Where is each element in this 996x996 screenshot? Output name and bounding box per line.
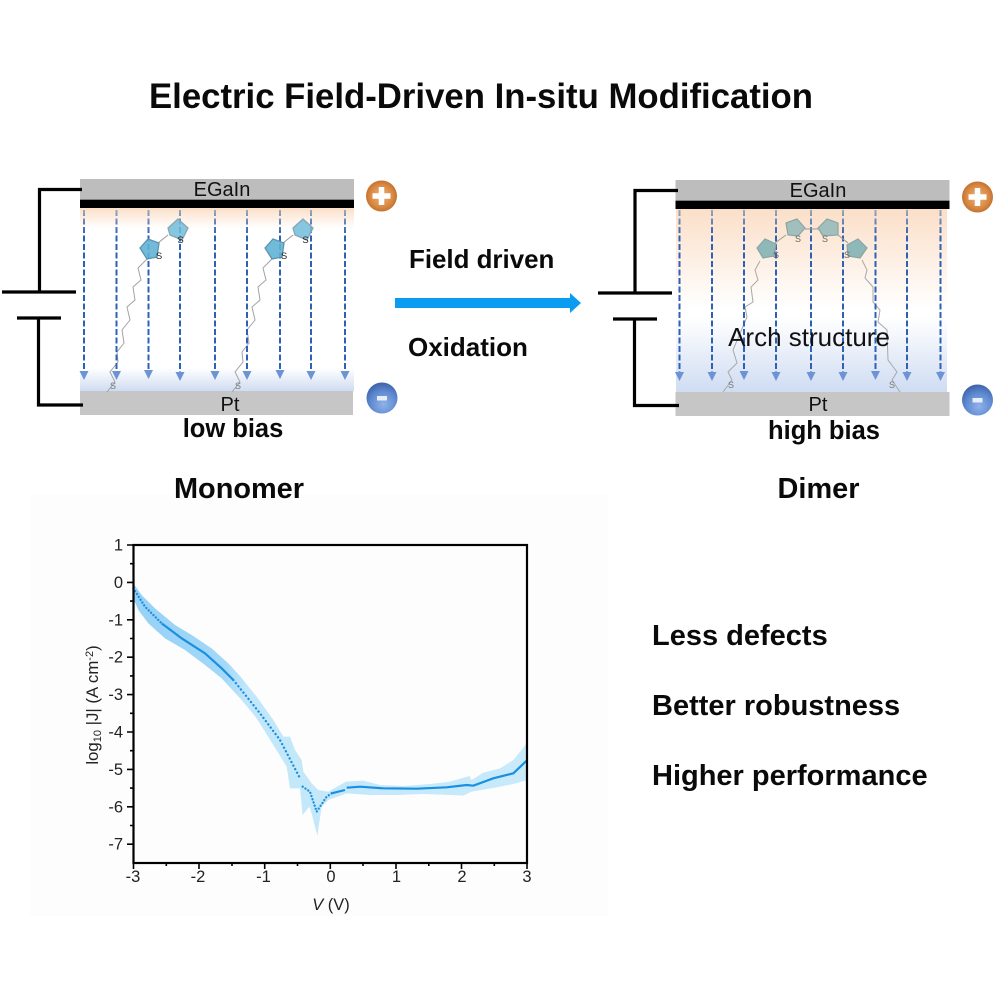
anchoring sulfur labels: S — [889, 380, 895, 390]
y axis title: log — [83, 742, 102, 765]
label: dimer: Dimer — [778, 473, 859, 505]
y axis tick labels: -6 — [108, 798, 123, 816]
negative terminal — [962, 384, 993, 416]
label: monomer: Monomer — [174, 473, 304, 505]
y axis tick labels: -1 — [108, 611, 123, 629]
label: field driven: Field driven — [409, 246, 554, 274]
thiophene dimer right: S — [281, 251, 287, 262]
y axis tick labels: -3 — [108, 686, 123, 704]
benefit: less defects: Less defects — [652, 620, 828, 652]
text: benefits list — [652, 620, 928, 792]
positive terminal — [962, 182, 993, 212]
top electrode EGaIn — [80, 179, 354, 208]
electric field arrows — [84, 210, 345, 380]
anchoring sulfur labels: S — [110, 381, 116, 391]
top electrode EGaIn: EGaIn — [194, 179, 250, 201]
anchoring sulfur labels — [110, 381, 241, 391]
thiophene tetramer arch: S — [822, 234, 828, 244]
x axis ticks — [134, 863, 527, 869]
caption: high bias: high bias — [768, 417, 880, 445]
chart: log J versus V — [83, 536, 532, 914]
panel: monomer junction at low bias — [2, 179, 398, 443]
thiophene dimer left: S — [156, 251, 162, 262]
orange field gradient — [676, 209, 947, 309]
x axis tick labels: 0 — [326, 868, 336, 886]
thiophene tetramer arch: S — [844, 250, 850, 260]
thiophene tetramer arch: S — [795, 234, 801, 244]
y axis title: -2 — [84, 651, 96, 661]
x axis tick labels: 2 — [457, 868, 467, 886]
thiophene tetramer arch — [757, 219, 867, 260]
curve with error band — [133, 583, 527, 836]
right alkyl chain — [862, 260, 900, 392]
blue field gradient — [676, 318, 947, 392]
bottom electrode Pt: Pt — [221, 394, 240, 416]
left alkyl chain — [723, 261, 760, 392]
top electrode EGaIn — [676, 180, 950, 209]
battery circuit — [598, 190, 679, 406]
y axis tick labels: -7 — [108, 836, 123, 854]
y axis tick labels: 0 — [114, 574, 123, 592]
anchoring sulfur labels — [728, 380, 895, 390]
bottom electrode Pt: Pt — [809, 394, 828, 416]
thiophene dimer left — [140, 219, 188, 262]
panel: dimer junction at high bias — [598, 180, 993, 445]
y axis ticks — [127, 545, 133, 844]
x axis tick labels: 3 — [522, 868, 532, 886]
orange field gradient — [80, 208, 354, 228]
negative terminal — [366, 382, 398, 414]
y axis title: |J| (A cm — [83, 661, 102, 730]
bottom electrode Pt — [80, 391, 353, 416]
y axis tick labels: -4 — [108, 724, 123, 742]
thiophene tetramer arch: S — [773, 250, 779, 260]
x axis tick labels — [126, 868, 532, 886]
thiophene dimer right: S — [302, 235, 309, 246]
top electrode EGaIn: EGaIn — [790, 180, 846, 202]
x axis tick labels: -1 — [256, 868, 271, 886]
chart backdrop — [30, 494, 608, 916]
molecule chain right — [232, 259, 272, 392]
bottom electrode Pt — [676, 392, 950, 416]
y axis tick labels: 1 — [114, 536, 123, 554]
molecule chain left — [107, 259, 147, 392]
anchoring sulfur labels: S — [728, 380, 734, 390]
arch structure label: Arch structure — [728, 322, 890, 352]
anchoring sulfur labels: S — [235, 381, 241, 391]
plot frame — [134, 545, 527, 863]
y axis title: ) — [83, 645, 102, 651]
thiophene dimer right — [265, 219, 313, 262]
x axis tick labels: 1 — [392, 868, 401, 886]
caption: low bias: low bias — [183, 415, 283, 443]
benefit: higher performance: Higher performance — [652, 760, 928, 792]
blue field gradient — [80, 368, 354, 391]
positive terminal — [366, 180, 397, 212]
benefit: better robustness: Better robustness — [652, 690, 900, 722]
x axis title: V (V) — [312, 896, 350, 914]
x axis tick labels: -3 — [126, 868, 140, 886]
thiophene dimer left: S — [177, 235, 184, 246]
y axis title: 10 — [92, 730, 104, 742]
y axis tick labels — [108, 536, 123, 854]
title: Electric Field-Driven In-situ Modification — [149, 77, 813, 116]
label: oxidation: Oxidation — [408, 332, 528, 362]
y axis tick labels: -5 — [108, 761, 123, 779]
electric field arrows — [680, 210, 940, 380]
x axis tick labels: -2 — [191, 868, 205, 886]
arrow: monomer to dimer — [395, 293, 581, 313]
y axis tick labels: -2 — [108, 649, 123, 667]
battery circuit — [2, 190, 83, 405]
